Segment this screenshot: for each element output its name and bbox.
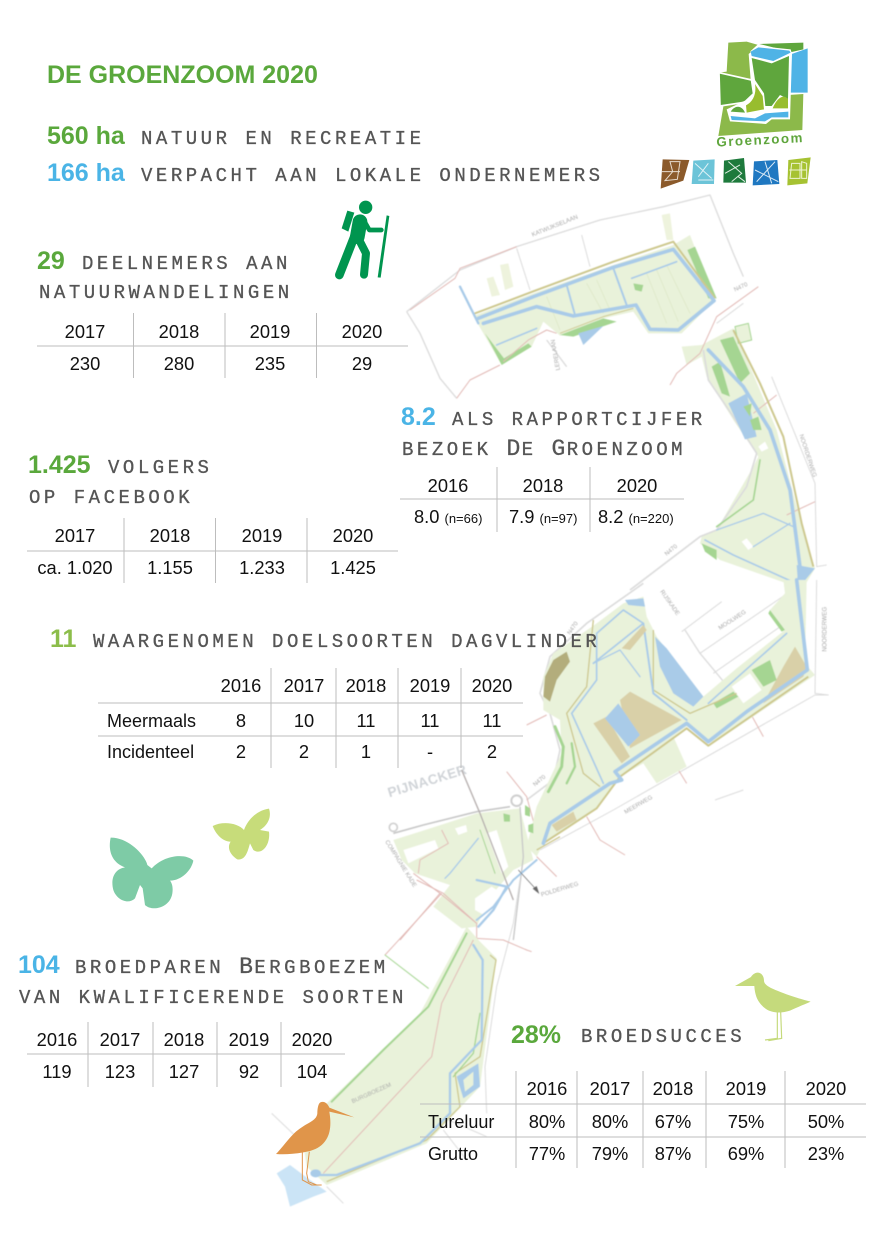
map: Bergboezem — [272, 880, 532, 1207]
table: broedsucces — [420, 1071, 866, 1168]
table: broedsucces: 67% — [655, 1111, 691, 1132]
table: broedsucces: 69% — [728, 1143, 764, 1164]
map label: COMPAGNIE KADE — [383, 840, 417, 889]
table: facebook: 2019 — [242, 525, 282, 546]
map label: N470 — [733, 282, 749, 293]
table: broedsucces: 2019 — [726, 1078, 766, 1099]
table: dagvlinders: 2017 — [284, 675, 324, 696]
stat: 11 doelsoorten: 11 — [50, 625, 77, 653]
table: broedparen: 2019 — [229, 1029, 269, 1050]
map label: Pijnacker: PIJNACKER — [386, 762, 469, 800]
table: dagvlinders: 2016 — [221, 675, 261, 696]
map label: MEERWEG — [624, 795, 654, 816]
stat: 11 doelsoorten: WAARGENOMEN DOELSOORTEN DAGVLINDER — [93, 631, 600, 653]
stat: 104 broedparen: 104 — [18, 951, 60, 979]
table: broedsucces: 2018 — [653, 1078, 693, 1099]
table: broedsucces: 80% — [592, 1111, 628, 1132]
icon: dark green — [723, 158, 746, 183]
title: DE GROENZOOM 2020 — [47, 61, 318, 89]
table: dagvlinders: 2020 — [472, 675, 512, 696]
table: broedparen: 127 — [169, 1061, 199, 1082]
table: dagvlinders: 2019 — [410, 675, 450, 696]
icon: lime — [787, 157, 811, 185]
stat: 166 ha — [47, 159, 604, 187]
stat: 29 deelnemers: DEELNEMERS AAN — [82, 253, 291, 275]
table: broedsucces: 80% — [529, 1111, 565, 1132]
map: northern section — [407, 195, 749, 398]
table: facebook: 1.155 — [147, 557, 193, 578]
icon row: five themes — [661, 157, 811, 189]
logo wordmark: Groenzoom — [716, 130, 804, 150]
table: dagvlinders: 11 — [421, 710, 439, 731]
stat: 560 ha: NATUUR EN RECREATIE — [141, 128, 425, 150]
stat: 28% broedsucces — [511, 1021, 745, 1049]
table: facebook: ca. 1.020 — [37, 557, 113, 578]
stat: 29 deelnemers: 29 — [37, 247, 65, 275]
table: dagvlinders: 1 — [361, 741, 371, 762]
table: broedparen: 104 — [297, 1061, 327, 1082]
stat: 28% broedsucces: 28% — [511, 1021, 561, 1049]
stat: 29 deelnemers — [37, 247, 293, 304]
map label: POLDERWEG — [540, 881, 580, 899]
icon: light blue — [692, 159, 715, 184]
table: natuurwandelingen: 2020 — [342, 321, 382, 342]
stat: 1.425 volgers — [28, 451, 212, 509]
icon: lime butterfly — [213, 809, 270, 859]
table: facebook: 1.425 — [330, 557, 376, 578]
map label: N470 — [532, 774, 548, 788]
table: natuurwandelingen: 230 — [70, 353, 100, 374]
map: Pijnacker junction — [383, 770, 560, 940]
table: dagvlinders: 11 — [357, 710, 375, 731]
stat: 28% broedsucces: BROEDSUCCES — [581, 1026, 745, 1048]
stat: 8.2 rapportcijfer: BEZOEK DE GROENZOOM — [402, 436, 686, 462]
table: natuurwandelingen: 2018 — [159, 321, 199, 342]
logo: Groenzoom boot — [716, 42, 808, 150]
table: dagvlinders: 2 — [236, 741, 246, 762]
table: broedparen: 2016 — [37, 1029, 77, 1050]
stat: 560 ha: 560 ha — [47, 122, 126, 150]
map: eastern strip — [630, 287, 827, 593]
map label: BURGBOEZEM — [351, 1082, 392, 1105]
table: rapportcijfer: 8.2 (n=220) — [598, 506, 674, 527]
table: dagvlinders: 10 — [294, 710, 314, 731]
stat: 104 broedparen: VAN KWALIFICERENDE SOORTEN — [19, 987, 407, 1009]
table: rapportcijfer: 2018 — [523, 475, 563, 496]
table: rapportcijfer — [400, 467, 684, 532]
map of De Groenzoom — [272, 195, 829, 1207]
table: rapportcijfer: 2016 — [428, 475, 468, 496]
table: natuurwandelingen: 2017 — [65, 321, 105, 342]
map: central polder — [386, 580, 829, 899]
table: facebook — [27, 518, 398, 583]
stat: 1.425 volgers: VOLGERS — [108, 457, 212, 479]
table: broedsucces: Tureluur — [428, 1112, 494, 1132]
table: natuurwandelingen: 235 — [255, 353, 285, 374]
map label: LERELAAN — [551, 339, 562, 371]
table: dagvlinders: 2 — [487, 741, 497, 762]
table: broedparen: 2017 — [100, 1029, 140, 1050]
table: natuurwandelingen — [37, 313, 408, 378]
stat: 1.425 volgers: OP FACEBOOK — [29, 487, 193, 509]
table: facebook: 2020 — [333, 525, 373, 546]
stat: 104 broedparen — [18, 951, 407, 1009]
table: broedsucces: 79% — [592, 1143, 628, 1164]
table: broedparen: 92 — [239, 1061, 259, 1082]
table: dagvlinders: Meermaals — [107, 711, 196, 731]
table: broedparen: 119 — [42, 1061, 72, 1082]
table: broedsucces: 2016 — [527, 1078, 567, 1099]
table: broedsucces: 87% — [655, 1143, 691, 1164]
icon: hiker — [339, 201, 389, 278]
table: broedsucces: 2017 — [590, 1078, 630, 1099]
table: rapportcijfer: 8.0 (n=66) — [414, 506, 482, 527]
map label: N470 — [664, 543, 679, 558]
map label: MOOLWEG — [718, 609, 748, 632]
table: broedsucces: Grutto — [428, 1144, 478, 1164]
table: broedparen: 123 — [105, 1061, 135, 1082]
table: dagvlinders: - — [427, 741, 433, 762]
table: dagvlinders: 8 — [236, 710, 246, 731]
table: broedparen — [27, 1022, 345, 1087]
stat: 1.425 volgers: 1.425 — [28, 451, 91, 479]
map label: KATWIJKSELAAN — [531, 215, 579, 239]
icon: brown — [661, 159, 689, 189]
table: dagvlinders: Incidenteel — [107, 742, 194, 762]
table: dagvlinders: 11 — [483, 710, 501, 731]
table: dagvlinders: 2018 — [346, 675, 386, 696]
table: broedsucces: 75% — [728, 1111, 764, 1132]
table: dagvlinders: 2 — [299, 741, 309, 762]
table: rapportcijfer: 2020 — [617, 475, 657, 496]
table: facebook: 2018 — [150, 525, 190, 546]
stat: 560 ha — [47, 122, 425, 150]
map label: NOORDERWEG — [823, 607, 829, 652]
table: natuurwandelingen: 2019 — [250, 321, 290, 342]
icon: green redshank — [735, 973, 811, 1041]
table: broedparen: 2018 — [164, 1029, 204, 1050]
table: broedsucces: 2020 — [806, 1078, 846, 1099]
table: broedsucces: 23% — [808, 1143, 844, 1164]
icon: blue — [753, 160, 779, 185]
stat: 8.2 rapportcijfer: 8.2 — [401, 403, 436, 431]
table: dagvlinders — [98, 668, 523, 768]
table: broedsucces: 50% — [808, 1111, 844, 1132]
table: facebook: 2017 — [55, 525, 95, 546]
stat: 166 ha: 166 ha — [47, 159, 126, 187]
stat: 29 deelnemers: NATUURWANDELINGEN — [39, 282, 293, 304]
stat: 8.2 rapportcijfer: ALS RAPPORTCIJFER — [452, 409, 706, 431]
table: natuurwandelingen: 280 — [164, 353, 194, 374]
table: broedsucces: 77% — [529, 1143, 565, 1164]
table: broedparen: 2020 — [292, 1029, 332, 1050]
stat: 8.2 rapportcijfer — [401, 403, 706, 462]
stat: 104 broedparen: BROEDPAREN BERGBOEZEM — [75, 954, 389, 980]
icon: orange godwit — [276, 1102, 354, 1185]
stat: 166 ha: VERPACHT AAN LOKALE ONDERNEMERS — [141, 165, 604, 187]
map label: NOORDERWEG — [797, 434, 817, 479]
map label: N470 — [567, 620, 580, 636]
icon: teal butterfly — [110, 838, 193, 908]
table: natuurwandelingen: 29 — [352, 353, 372, 374]
map label: RIJSKADE — [658, 589, 680, 617]
table: facebook: 1.233 — [239, 557, 285, 578]
icon: butterflies — [110, 809, 270, 908]
table: rapportcijfer: 7.9 (n=97) — [509, 506, 577, 527]
